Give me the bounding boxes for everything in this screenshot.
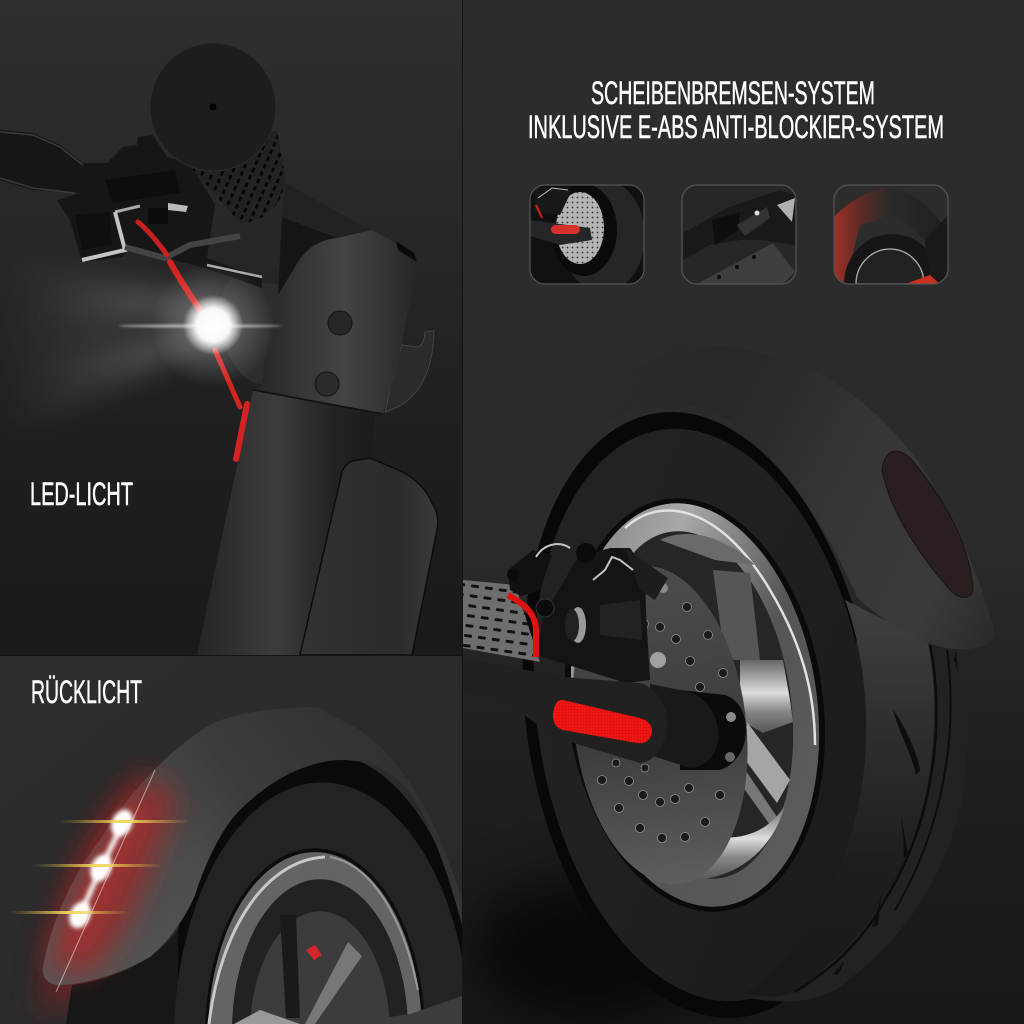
- spokes: [713, 570, 760, 660]
- stem: [197, 391, 329, 655]
- thumbnail: brake lever: [682, 185, 796, 284]
- panel: rear light: [0, 656, 479, 1024]
- red tail glow: [48, 775, 178, 975]
- label: LED-Licht: LED-LICHT: [30, 476, 133, 512]
- lamp housing: [228, 282, 278, 384]
- deck: [463, 580, 540, 662]
- panel: LED light: [0, 0, 462, 655]
- thumbnail: brake disc: [530, 180, 645, 292]
- thumbnail: rear fender: [833, 185, 948, 284]
- headlight glare: [118, 270, 282, 380]
- panel: disc brake: [463, 0, 1024, 1024]
- red reflector: [553, 700, 652, 743]
- tread: [752, 640, 878, 1002]
- battery box: [300, 458, 438, 655]
- brake lever: [0, 130, 262, 288]
- swing arm: [522, 670, 746, 770]
- tread grooves: [795, 645, 958, 992]
- red background halo: [40, 770, 160, 1015]
- tire sidewall: [534, 429, 856, 1001]
- fender: [43, 707, 462, 985]
- rear deck: [390, 996, 462, 1024]
- fender: [808, 404, 986, 649]
- fender gap: [522, 412, 857, 1018]
- caliper: [507, 543, 668, 683]
- label: Rücklicht: RÜCKLICHT: [31, 674, 142, 710]
- brake disc: [573, 566, 748, 884]
- red cable: [138, 222, 247, 459]
- title: [530, 81, 943, 138]
- tire shoulder: [745, 600, 934, 997]
- LED flares: [10, 770, 190, 992]
- steering head: [253, 217, 417, 414]
- hook: [385, 331, 434, 412]
- rear rim: [205, 848, 425, 1024]
- grip: [150, 43, 285, 223]
- rim: [565, 498, 825, 912]
- light beam: [39, 272, 202, 404]
- tire: [66, 753, 479, 1024]
- ground shadow: [474, 876, 669, 1020]
